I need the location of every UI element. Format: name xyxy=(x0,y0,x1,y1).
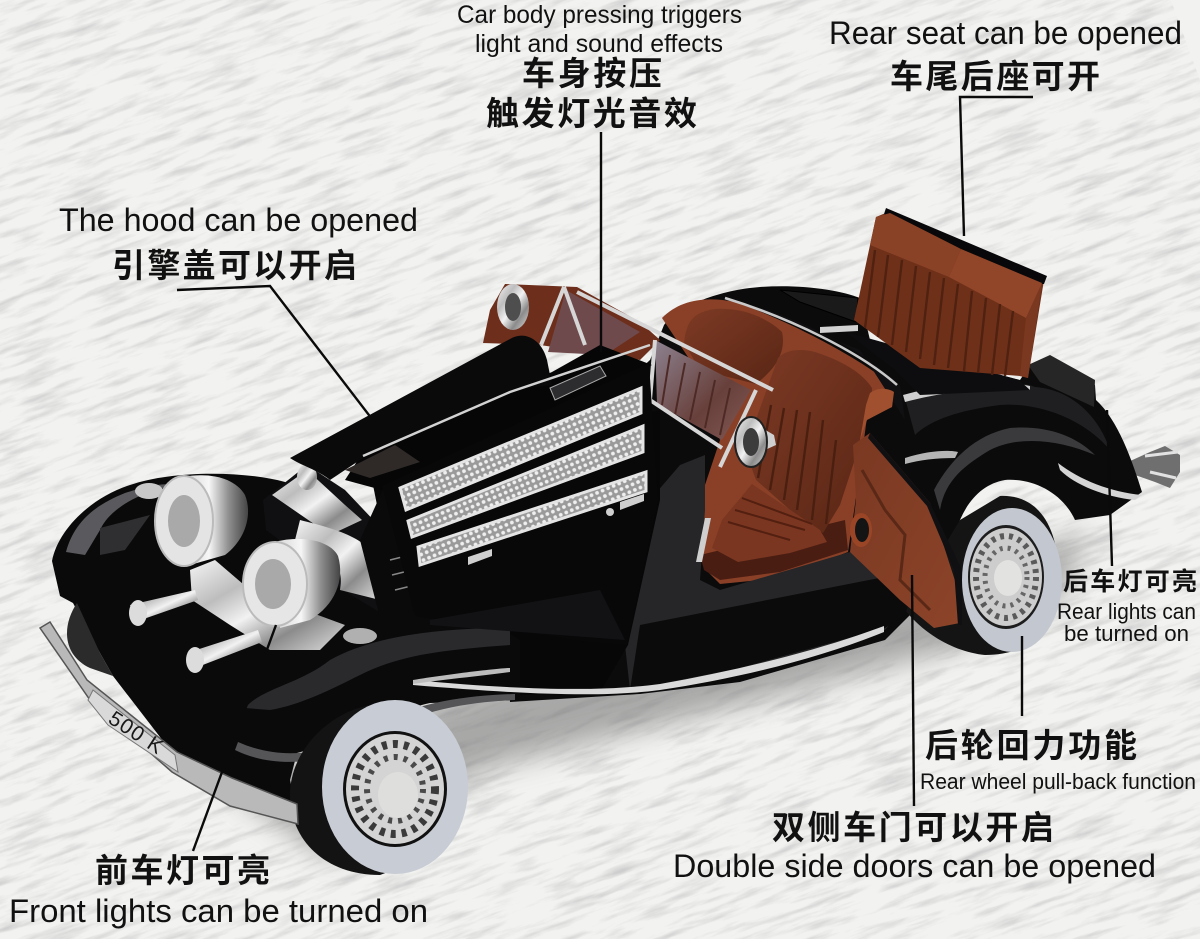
front left tyre xyxy=(67,603,113,676)
label: hood: 引擎盖可以开启 xyxy=(112,247,357,284)
front body xyxy=(52,474,520,812)
right door, opened xyxy=(850,433,962,628)
rear trunk grille xyxy=(1028,355,1095,407)
label: hood: The hood can be opened xyxy=(59,202,418,238)
body sill xyxy=(630,570,920,690)
headlight: right xyxy=(243,539,340,628)
door upper vent xyxy=(550,366,606,400)
leader line: rear seat xyxy=(960,97,1033,236)
leader line: rear wheel xyxy=(1021,636,1023,716)
license plate: 500 K xyxy=(104,707,167,759)
front wheel xyxy=(290,700,468,875)
rear deck xyxy=(725,290,1030,420)
label: body press: light and sound effects xyxy=(475,30,723,58)
label: doors: 双侧车门可以开启 xyxy=(772,809,1054,846)
leader line: rear lights xyxy=(1107,410,1112,566)
label: rear seat: 车尾后座可开 xyxy=(890,58,1100,95)
license plate xyxy=(88,690,178,772)
leader line: front lights xyxy=(193,625,276,851)
seat: near xyxy=(745,350,872,533)
seat: cushion xyxy=(712,484,827,562)
front body highlights xyxy=(66,483,884,762)
chrome grille and engine xyxy=(263,464,415,618)
seat: far xyxy=(684,309,783,384)
rear body xyxy=(500,286,1142,702)
interior tub and carpet xyxy=(662,299,894,584)
headlight: left xyxy=(155,475,248,566)
windshield xyxy=(483,284,776,467)
label: front lights xyxy=(9,852,428,929)
label: rear lights: Rear lights can xyxy=(1057,599,1196,624)
label: rear wheel: Rear wheel pull-back function xyxy=(920,769,1196,794)
rear fender highlights xyxy=(903,382,1142,510)
label: rear lights: 后车灯可亮 xyxy=(1063,568,1197,596)
rear bumper xyxy=(1128,446,1180,488)
open hood xyxy=(290,336,652,490)
small door handle xyxy=(696,518,711,562)
door frame and sill xyxy=(620,455,910,690)
label: body press: 车身按压 xyxy=(522,55,662,92)
label: doors xyxy=(673,809,1156,884)
label: front lights: Front lights can be turned on xyxy=(9,893,428,929)
front bumper xyxy=(40,622,298,824)
leader line: doors xyxy=(912,575,914,806)
lamp support and red trim xyxy=(483,284,660,360)
label: rear seat xyxy=(829,15,1182,95)
label: body press xyxy=(457,1,742,132)
label: rear seat: Rear seat can be opened xyxy=(829,15,1182,51)
label: rear lights xyxy=(1057,568,1197,646)
rear wheel xyxy=(905,496,1062,655)
car illustration xyxy=(40,208,1180,875)
label: rear wheel: 后轮回力功能 xyxy=(925,727,1137,764)
label: body press: Car body pressing triggers xyxy=(457,1,742,29)
leader line: body press xyxy=(600,132,602,352)
ground shadow xyxy=(230,530,1090,860)
open left door xyxy=(382,363,658,645)
horns xyxy=(129,590,262,673)
front seats xyxy=(684,309,894,562)
label: rear wheel xyxy=(920,727,1196,794)
label: body press: 触发灯光音效 xyxy=(486,95,697,132)
leader line: hood xyxy=(177,286,385,436)
door strips: perforated chrome xyxy=(400,388,646,565)
label: doors: Double side doors can be opened xyxy=(673,848,1156,884)
rear seat, opened xyxy=(854,208,1047,378)
label: front lights: 前车灯可亮 xyxy=(95,852,270,889)
label: hood xyxy=(59,202,418,284)
label: rear lights: be turned on xyxy=(1064,621,1189,646)
chrome headlight stand xyxy=(190,560,345,650)
center body black xyxy=(370,410,660,700)
